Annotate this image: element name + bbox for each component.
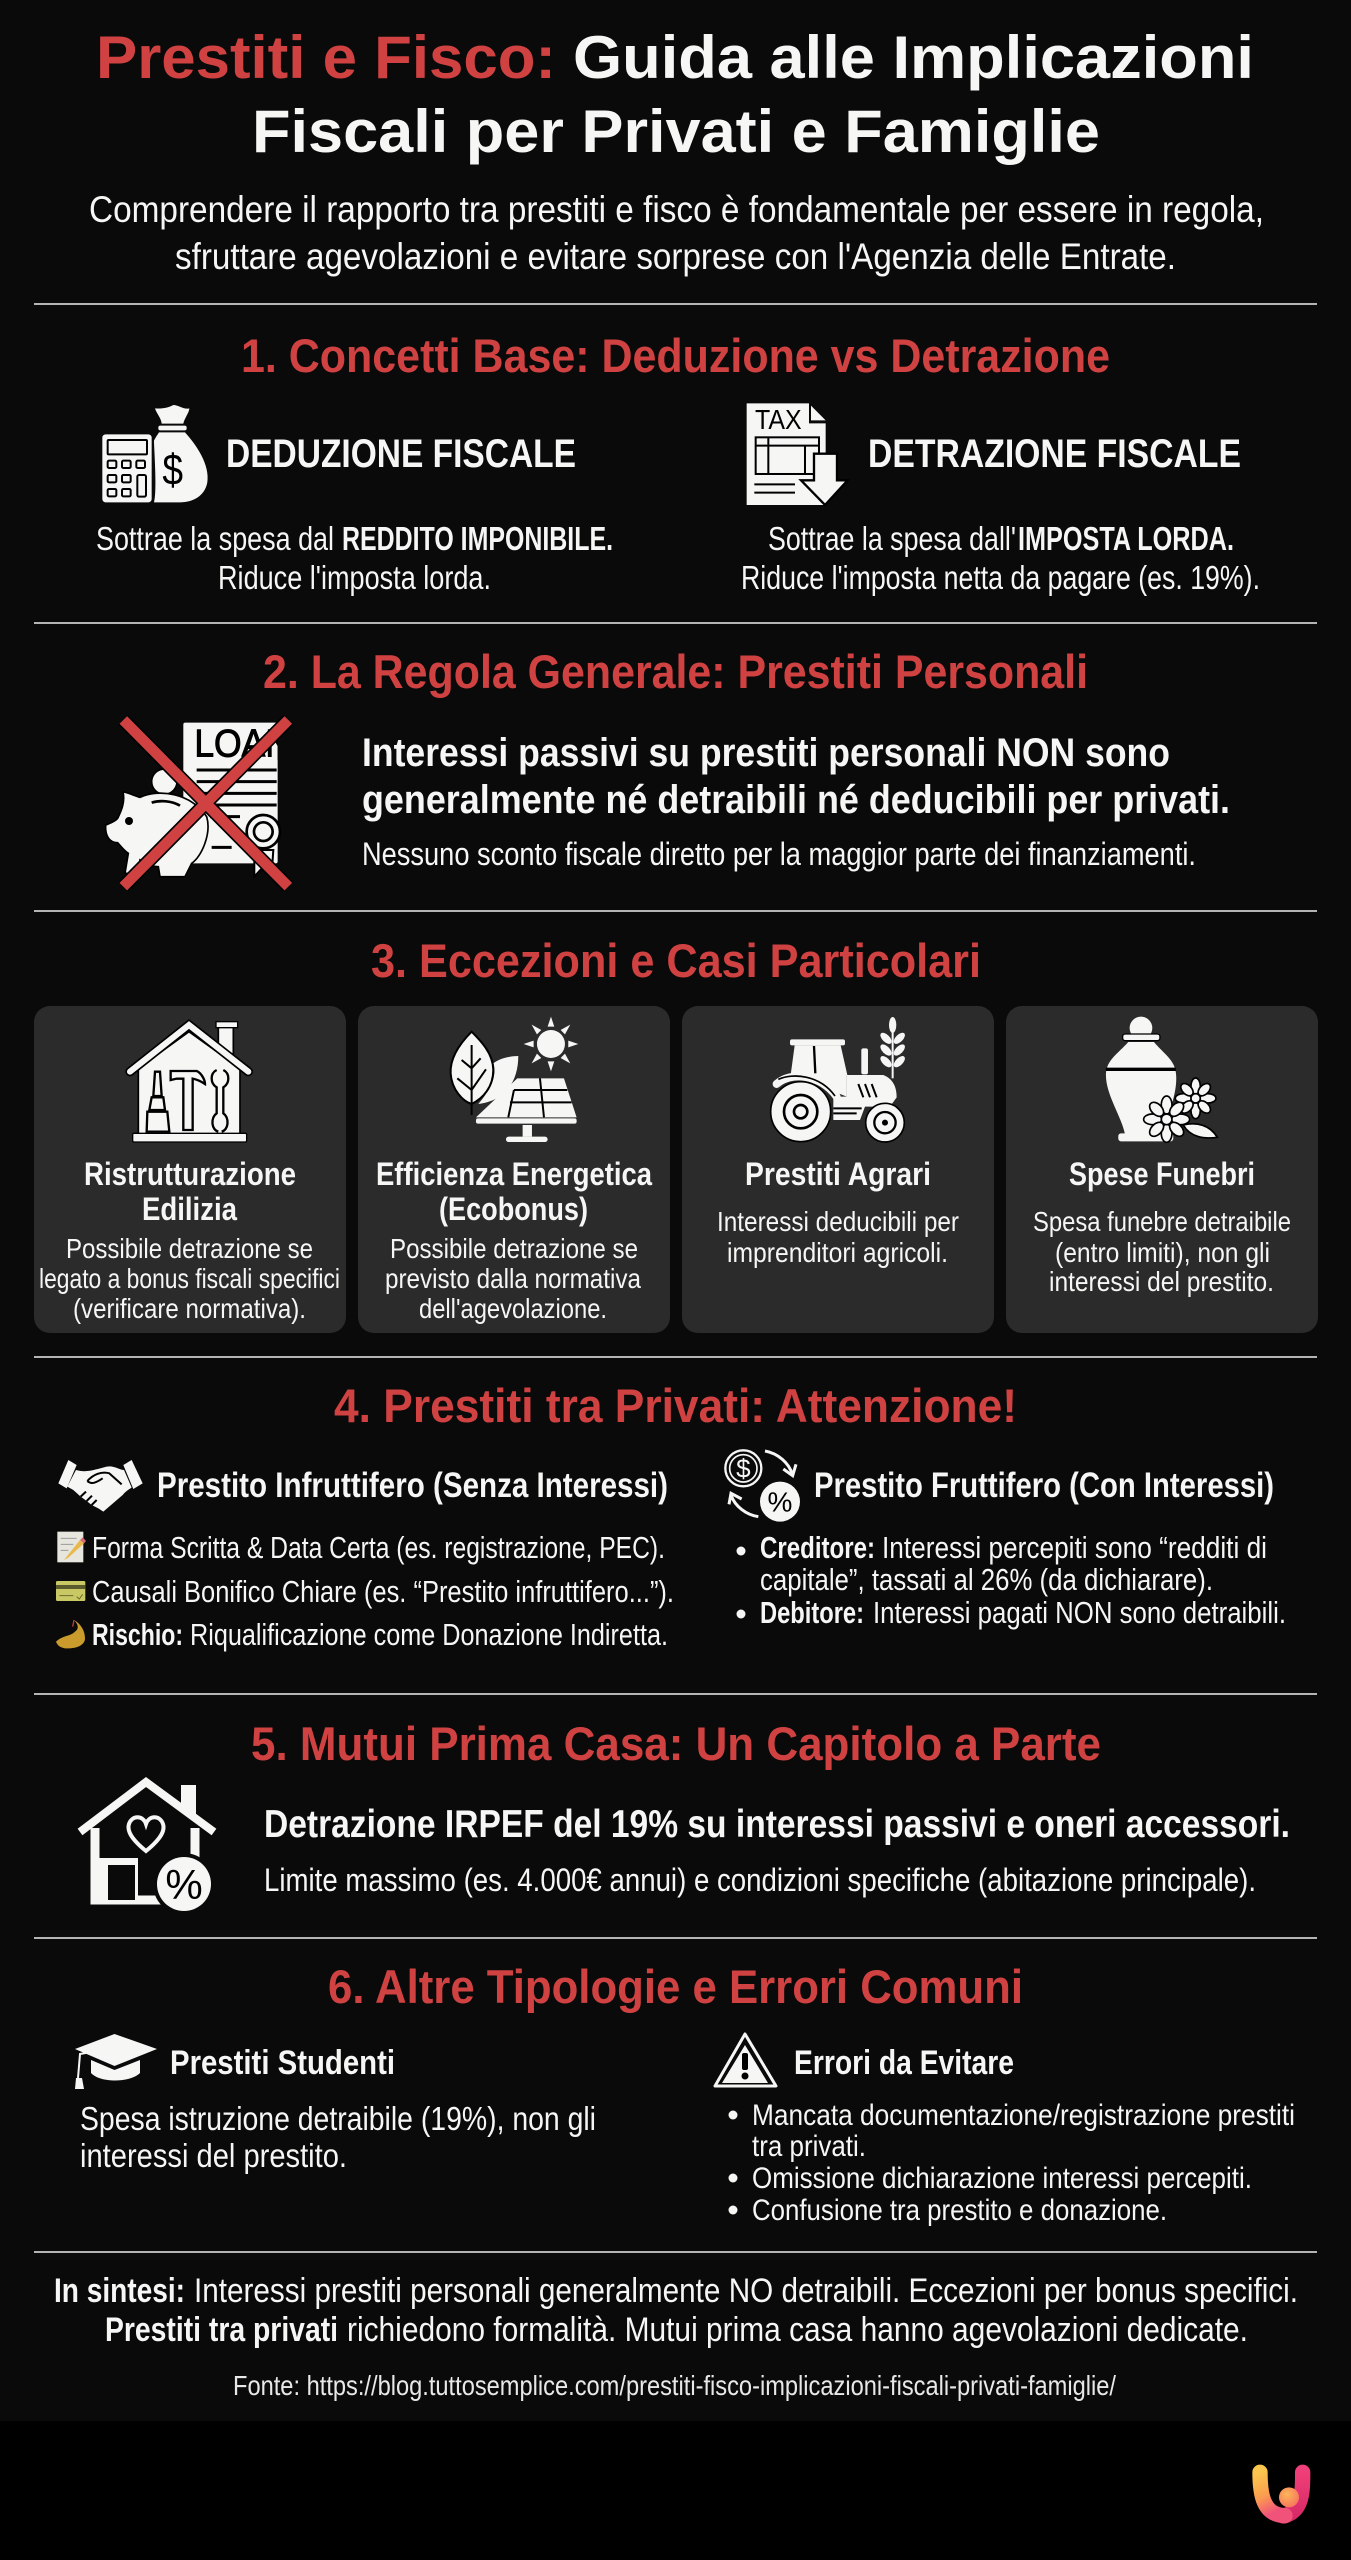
- title: Guida alle Implicazioni: [573, 24, 1254, 91]
- card description: [39, 1233, 340, 1324]
- card description: (entro limiti), non gli: [1055, 1237, 1270, 1268]
- list: prestito infruttifero: Rischio:: [92, 1617, 183, 1652]
- text: general rule: Interessi passivi su prestiti personali NON sono: [362, 731, 1170, 775]
- title: [96, 24, 1254, 165]
- icon: house with heart and percent: [80, 1782, 215, 1915]
- text: deduzione: REDDITO IMPONIBILE.: [342, 520, 613, 557]
- icon: calculator and money bag: $: [162, 446, 183, 494]
- heading: section 6: 6. Altre Tipologie e Errori Comuni: [328, 1960, 1023, 2013]
- card title: Ristrutturazione: [84, 1156, 296, 1192]
- heading: section 1: 1. Concetti Base: Deduzione vs Detrazione: [241, 329, 1110, 382]
- heading: section 3: 3. Eccezioni e Casi Particolari: [371, 934, 981, 987]
- list: prestito fruttifero: Interessi percepiti sono “redditi di: [882, 1530, 1267, 1565]
- card: efficienza energetica: [358, 1006, 670, 1333]
- heading: deduzione fiscale: DEDUZIONE FISCALE: [226, 432, 576, 476]
- icon: house with tools: [130, 1022, 248, 1142]
- subtitle: sfruttare agevolazioni e evitare sorprese con l'Agenzia delle Entrate.: [175, 236, 1176, 277]
- card description: legato a bonus fiscali specifici: [39, 1263, 340, 1294]
- heading: section 2: 2. La Regola Generale: Prestiti Personali: [263, 645, 1088, 698]
- card description: [717, 1206, 959, 1268]
- summary: richiedono formalità. Mutui prima casa hanno agevolazioni dedicate.: [347, 2311, 1248, 2349]
- heading: detrazione fiscale: DETRAZIONE FISCALE: [868, 432, 1241, 476]
- list: prestito infruttifero: Riqualificazione come Donazione Indiretta.: [190, 1617, 668, 1652]
- icon: memo emoji: [57, 1532, 86, 1562]
- text: prestiti studenti: interessi del prestito.: [80, 2137, 347, 2174]
- icon: tax document with down arrow: TAX: [755, 404, 802, 435]
- card title: Prestiti Agrari: [745, 1156, 931, 1192]
- panel: section 2 regola generale: [106, 645, 1230, 887]
- icon: urn with flowers: [1106, 1017, 1217, 1142]
- card description: dell'agevolazione.: [419, 1293, 607, 1324]
- card description: Possibile detrazione se: [390, 1233, 638, 1264]
- icon: handshake: [58, 1460, 143, 1512]
- text: deduzione: [96, 520, 613, 596]
- list: errori da evitare: Omissione dichiarazione interessi percepiti.: [752, 2162, 1252, 2195]
- icon: house with heart and percent: %: [165, 1861, 203, 1908]
- list: prestito fruttifero: Creditore:: [760, 1530, 875, 1565]
- list: errori da evitare: Confusione tra prestito e donazione.: [752, 2194, 1167, 2227]
- icon: tractor and wheat: [771, 1017, 907, 1142]
- text: deduzione: Riduce l'imposta lorda.: [218, 559, 491, 596]
- icon: warning triangle: [715, 2034, 776, 2086]
- subheading: prestito fruttifero: Prestito Fruttifero (Con Interessi): [814, 1466, 1274, 1505]
- card title: Edilizia: [142, 1191, 237, 1227]
- card description: Possibile detrazione se: [66, 1233, 313, 1264]
- list: prestito infruttifero: Causali Bonifico Chiare (es. “Prestito infruttifero...”).: [92, 1574, 674, 1609]
- summary: In sintesi:: [54, 2272, 185, 2310]
- text: general rule: generalmente né detraibili né deducibili per privati.: [362, 778, 1230, 822]
- title: Prestiti e Fisco:: [96, 24, 556, 91]
- text: detrazione: [741, 520, 1260, 596]
- icon: risk emoji: [56, 1620, 85, 1648]
- list: prestito infruttifero: Forma Scritta & Data Certa (es. registrazione, PEC).: [92, 1530, 665, 1565]
- card description: previsto dalla normativa: [385, 1263, 641, 1294]
- text: general rule: [362, 731, 1230, 872]
- list: prestito infruttifero: [56, 1530, 674, 1652]
- card title: [84, 1156, 296, 1227]
- heading: section 5: 5. Mutui Prima Casa: Un Capitolo a Parte: [251, 1717, 1101, 1770]
- panel: section 1 concetti base: [96, 329, 1260, 596]
- list: errori da evitare: tra privati.: [752, 2130, 866, 2163]
- icon: credit card emoji: [56, 1581, 85, 1601]
- icon: money and percent exchange: [725, 1450, 800, 1522]
- list: prestito fruttifero: Debitore:: [760, 1595, 864, 1630]
- subheading: prestiti studenti: Prestiti Studenti: [170, 2044, 395, 2082]
- panel: section 6 altre tipologie: [75, 1960, 1295, 2227]
- card title: Spese Funebri: [1069, 1156, 1255, 1192]
- card title: (Ecobonus): [439, 1191, 588, 1227]
- icon: money and percent exchange: %: [768, 1487, 792, 1518]
- icon: graduation cap: [75, 2034, 157, 2089]
- icon: crossed piggy bank and loan document: [106, 720, 298, 887]
- text: deduzione: Sottrae la spesa dal: [96, 520, 334, 557]
- list: errori da evitare: [728, 2099, 1295, 2227]
- icon: crossed piggy bank and loan document: LOAN: [194, 722, 291, 766]
- card description: imprenditori agricoli.: [727, 1237, 948, 1268]
- panel: section 5 mutui prima casa: [80, 1717, 1290, 1915]
- text: detrazione: IMPOSTA LORDA.: [1018, 520, 1234, 557]
- list: prestito fruttifero: [736, 1530, 1286, 1630]
- card description: Interessi deducibili per: [717, 1206, 959, 1237]
- list: prestito fruttifero: capitale”, tassati al 26% (da dichiarare).: [760, 1562, 1213, 1597]
- subheading: prestito infruttifero: Prestito Infruttifero (Senza Interessi): [157, 1466, 668, 1505]
- panel: section 3 eccezioni: [34, 934, 1318, 1333]
- summary: [54, 2272, 1298, 2349]
- card description: [385, 1233, 641, 1324]
- card description: Spesa funebre detraibile: [1033, 1206, 1291, 1237]
- subheading: errori da evitare: Errori da Evitare: [794, 2044, 1014, 2082]
- icon: tax document with down arrow: [747, 403, 848, 505]
- source: Fonte: https://blog.tuttosemplice.com/prestiti-fisco-implicazioni-fiscali-privati-famiglie/: [233, 2370, 1116, 2401]
- icon: calculator and money bag: [102, 405, 208, 502]
- text: detrazione: Sottrae la spesa dall': [768, 520, 1016, 557]
- text: prestiti studenti: Spesa istruzione detraibile (19%), non gli: [80, 2100, 596, 2137]
- card description: interessi del prestito.: [1049, 1266, 1274, 1297]
- card: spese funebri: [1006, 1006, 1318, 1333]
- card title: Efficienza Energetica: [376, 1156, 652, 1192]
- card title: [376, 1156, 652, 1227]
- subtitle: [89, 189, 1264, 277]
- panel: section 4 prestiti tra privati: [56, 1379, 1286, 1652]
- card: prestiti agrari: [682, 1006, 994, 1333]
- title: Fiscali per Privati e Famiglie: [252, 98, 1100, 165]
- icon: money and percent exchange: $: [736, 1454, 751, 1484]
- text: general rule: Nessuno sconto fiscale diretto per la maggior parte dei finanziamenti.: [362, 836, 1196, 872]
- summary: Prestiti tra privati: [105, 2311, 338, 2349]
- icon: leaf sun and solar panel: [451, 1017, 578, 1142]
- card description: (verificare normativa).: [73, 1293, 306, 1324]
- icon: logo: [1260, 2472, 1303, 2516]
- text: mutui: [264, 1803, 1290, 1898]
- card: ristrutturazione edilizia: [34, 1006, 346, 1333]
- heading: section 4: 4. Prestiti tra Privati: Attenzione!: [334, 1379, 1017, 1432]
- card description: [1033, 1206, 1291, 1297]
- text: prestiti studenti: [80, 2100, 596, 2174]
